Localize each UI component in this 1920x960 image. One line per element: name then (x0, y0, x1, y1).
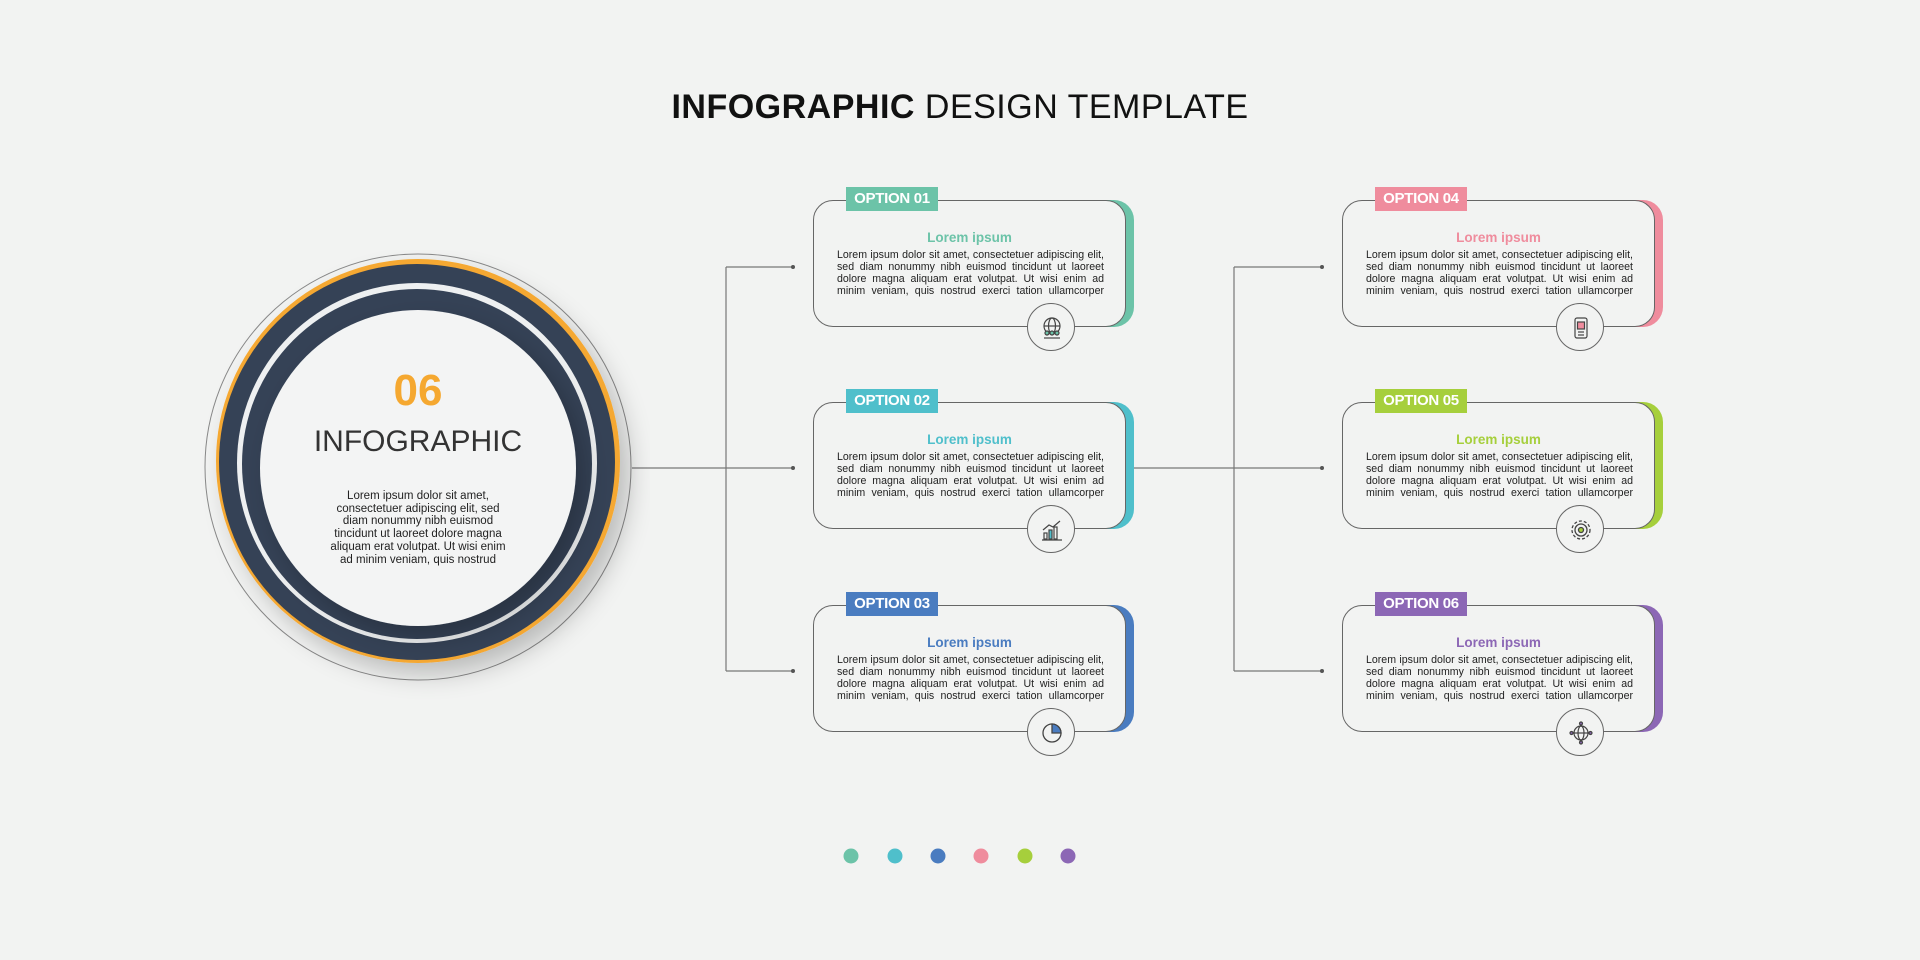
text: sed diam nonummy nibh euismod tincidunt ut laoreet (1366, 463, 1633, 475)
heading: Lorem ipsum (927, 230, 1012, 245)
text: Lorem ipsum dolor sit amet, consectetuer adipiscing elit, (1366, 451, 1633, 463)
text (1366, 451, 1633, 499)
heading: Lorem ipsum (927, 432, 1012, 447)
text (1366, 654, 1633, 702)
center body text (330, 490, 506, 566)
legend dots (844, 848, 1076, 864)
text: minim veniam, quis nostrud exerci tation ullamcorper (837, 487, 1104, 499)
text: sed diam nonummy nibh euismod tincidunt ut laoreet (1366, 666, 1633, 678)
text: sed diam nonummy nibh euismod tincidunt ut laoreet (1366, 261, 1633, 273)
label option 01 (846, 187, 938, 211)
panel: option 05 (1342, 389, 1663, 553)
text: minim veniam, quis nostrud exerci tation ullamcorper (1366, 690, 1633, 702)
panel: option 04 (1342, 187, 1663, 351)
text: dolore magna aliquam erat volutpat. Ut wisi enim ad (837, 273, 1104, 285)
heading: Lorem ipsum (927, 635, 1012, 650)
text: Lorem ipsum dolor sit amet, consectetuer adipiscing elit, (837, 451, 1104, 463)
text (837, 451, 1104, 499)
text: minim veniam, quis nostrud exerci tation ullamcorper (837, 285, 1104, 297)
center body text: consectetuer adipiscing elit, sed (336, 503, 500, 515)
text (837, 249, 1104, 297)
label option 04: OPTION 04 (1383, 190, 1459, 207)
label option 06: OPTION 06 (1383, 595, 1459, 612)
center body text: ad minim veniam, quis nostrud (340, 554, 496, 566)
text: minim veniam, quis nostrud exerci tation ullamcorper (837, 690, 1104, 702)
panel: option 01 (813, 187, 1134, 351)
icon: chart (1027, 505, 1075, 553)
heading INFOGRAPHIC: INFOGRAPHIC (314, 425, 522, 458)
text: minim veniam, quis nostrud exerci tation ullamcorper (1366, 487, 1633, 499)
heading: Lorem ipsum (1456, 432, 1541, 447)
panel: option 03 (813, 592, 1134, 756)
number 06: 06 (394, 366, 442, 415)
label option 06 (1375, 592, 1467, 616)
central circle (204, 254, 642, 686)
text: sed diam nonummy nibh euismod tincidunt ut laoreet (837, 666, 1104, 678)
text: Lorem ipsum dolor sit amet, consectetuer adipiscing elit, (837, 654, 1104, 666)
icon: mobile (1556, 303, 1604, 351)
center body text: aliquam erat volutpat. Ut wisi enim (330, 541, 506, 553)
label option 05 (1375, 389, 1467, 413)
panel: option 06 (1342, 592, 1663, 756)
center body text: diam nonummy nibh euismod (343, 515, 493, 527)
label option 03: OPTION 03 (854, 595, 930, 612)
icon: network globe (1556, 708, 1604, 756)
text: Lorem ipsum dolor sit amet, consectetuer adipiscing elit, (837, 249, 1104, 261)
title: INFOGRAPHIC DESIGN TEMPLATE (671, 88, 1249, 126)
label option 02 (846, 389, 938, 413)
text (1366, 249, 1633, 297)
icon: globe people (1027, 303, 1075, 351)
text: dolore magna aliquam erat volutpat. Ut wisi enim ad (837, 678, 1104, 690)
icon: pie chart (1027, 708, 1075, 756)
label option 05: OPTION 05 (1383, 392, 1459, 409)
text: Lorem ipsum dolor sit amet, consectetuer adipiscing elit, (1366, 249, 1633, 261)
text (837, 654, 1104, 702)
center body text: tincidunt ut laoreet dolore magna (334, 528, 502, 540)
text: dolore magna aliquam erat volutpat. Ut wisi enim ad (1366, 273, 1633, 285)
text: dolore magna aliquam erat volutpat. Ut wisi enim ad (1366, 475, 1633, 487)
text: sed diam nonummy nibh euismod tincidunt ut laoreet (837, 261, 1104, 273)
label option 01: OPTION 01 (854, 190, 930, 207)
text: dolore magna aliquam erat volutpat. Ut wisi enim ad (1366, 678, 1633, 690)
text: sed diam nonummy nibh euismod tincidunt ut laoreet (837, 463, 1104, 475)
panel: option 02 (813, 389, 1134, 553)
heading: Lorem ipsum (1456, 230, 1541, 245)
label option 02: OPTION 02 (854, 392, 930, 409)
center body text: Lorem ipsum dolor sit amet, (347, 490, 489, 502)
icon: gear (1556, 505, 1604, 553)
text: Lorem ipsum dolor sit amet, consectetuer adipiscing elit, (1366, 654, 1633, 666)
heading: Lorem ipsum (1456, 635, 1541, 650)
label option 03 (846, 592, 938, 616)
text: dolore magna aliquam erat volutpat. Ut wisi enim ad (837, 475, 1104, 487)
text: minim veniam, quis nostrud exerci tation ullamcorper (1366, 285, 1633, 297)
label option 04 (1375, 187, 1467, 211)
